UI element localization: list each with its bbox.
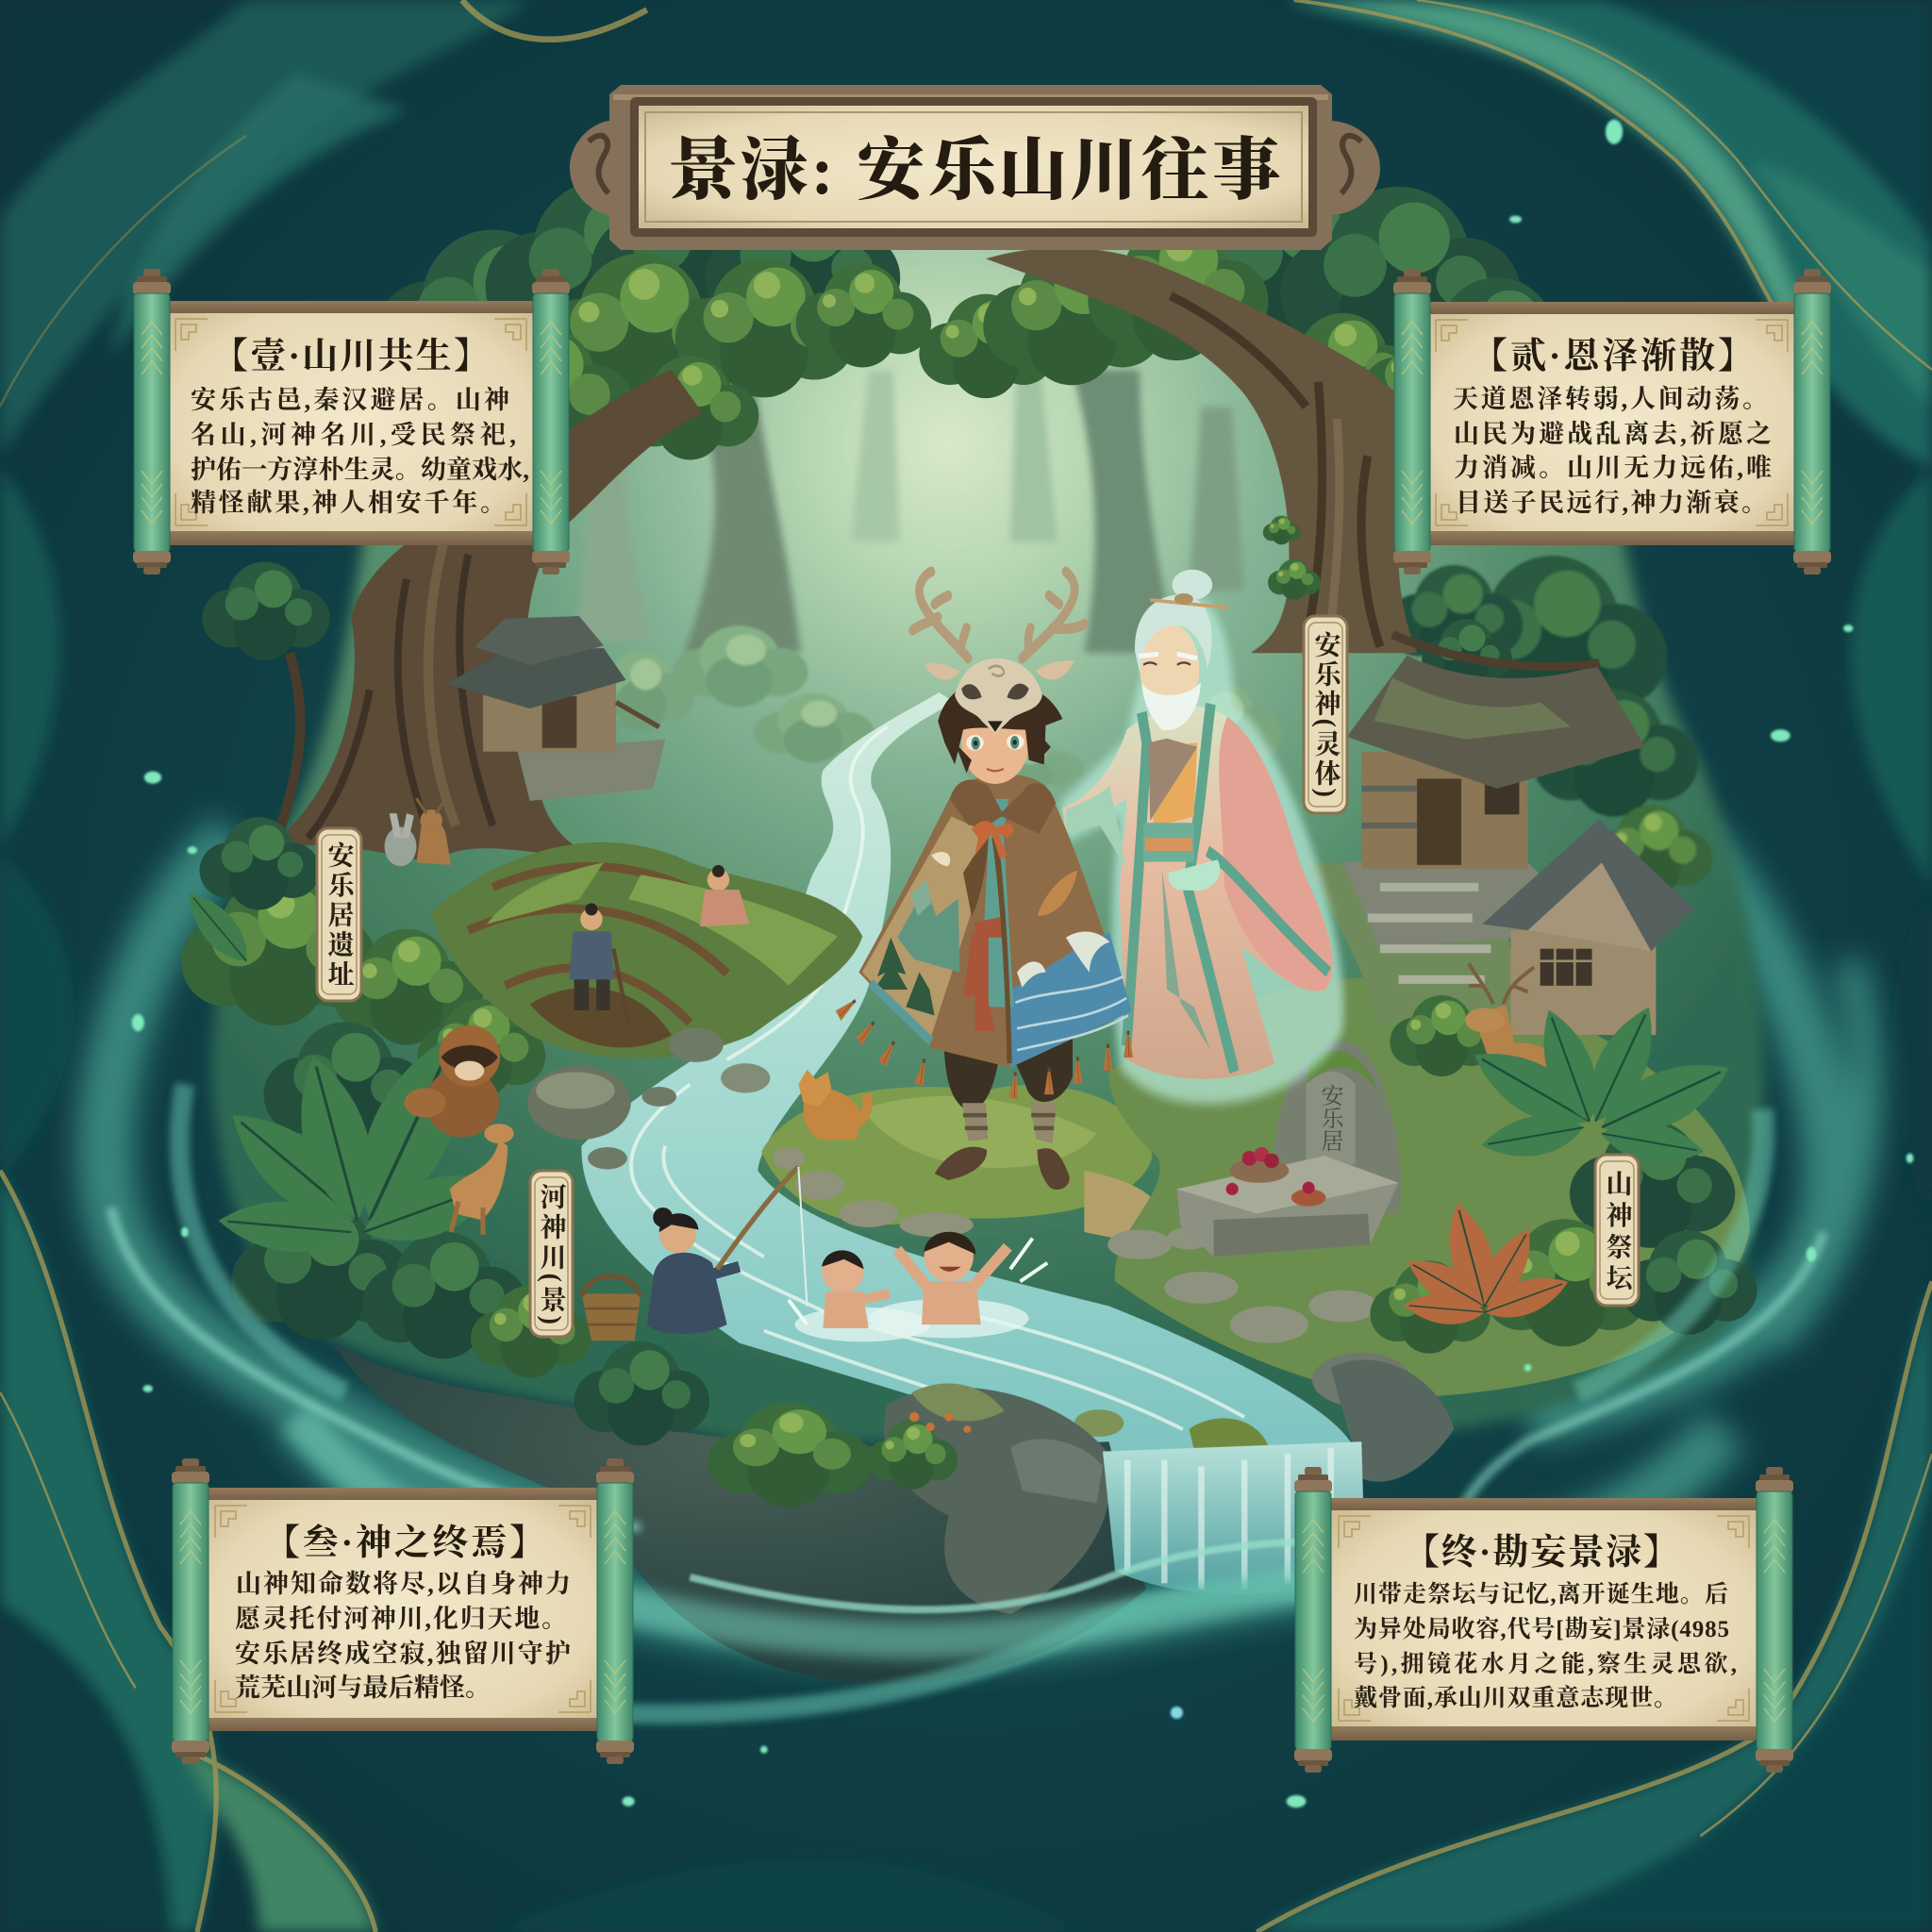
icon: moss-roof house bbox=[1343, 619, 1645, 979]
body text: 山民为避战乱离去,祈愿之 bbox=[1454, 419, 1772, 448]
legs bbox=[935, 1007, 1073, 1190]
panel: 终·勘妄景渌 bbox=[1294, 1467, 1793, 1773]
icon: left jungle leaves bbox=[176, 882, 512, 1258]
title plaque bbox=[570, 85, 1380, 250]
panel: 壹·山川共生 bbox=[133, 269, 570, 575]
body text: 荒芜山河与最后精怪。 bbox=[235, 1674, 491, 1702]
icon: swimming children bbox=[789, 1232, 1047, 1341]
label: 安乐居遗址: 安乐居遗址 bbox=[325, 841, 355, 987]
center grass island bbox=[761, 1085, 1160, 1244]
forest and river island illustration bbox=[111, 168, 1824, 1714]
body text: 戴骨面,承山川双重意志现世。 bbox=[1354, 1684, 1677, 1711]
title text: 景渌: 安乐山川往事 bbox=[669, 133, 1280, 208]
spirit elder (安乐神) bbox=[1059, 570, 1343, 1104]
body text bbox=[191, 386, 529, 517]
label: 安乐神(灵体) bbox=[1304, 616, 1347, 813]
body text: 号),拥镜花水月之能,察生灵思欲, bbox=[1354, 1650, 1737, 1677]
tree canopy bbox=[375, 168, 1596, 497]
body text: 力消减。山川无力远佑,唯 bbox=[1454, 454, 1772, 482]
hood bbox=[950, 780, 1056, 834]
icon: stele and altar bbox=[1176, 1041, 1401, 1257]
heading: 【终·勘妄景渌】 bbox=[1404, 1533, 1679, 1573]
icon: small fawn bbox=[450, 1124, 514, 1235]
boy with deer-skull mask and painted cloak bbox=[858, 572, 1132, 1190]
body text: 护佑一方淳朴生灵。幼童戏水, bbox=[191, 456, 529, 484]
label: 山神祭坛 bbox=[1595, 1155, 1639, 1306]
icon: orange foliage bbox=[1400, 1198, 1574, 1328]
label: 河神川(景): 河神川(景) bbox=[536, 1183, 566, 1324]
icon: tanuki bbox=[404, 1025, 500, 1138]
stele inscription: 安乐居 bbox=[1317, 1084, 1343, 1152]
back glow wisps bbox=[106, 838, 1867, 1641]
label: 安乐居遗址 bbox=[317, 828, 361, 1001]
front glow wisps bbox=[111, 1084, 1824, 1714]
head bbox=[961, 702, 1029, 784]
body text: 安乐居终成空寂,独留川守护 bbox=[235, 1639, 571, 1668]
label: 河神川(景) bbox=[530, 1171, 573, 1337]
stream rocks bbox=[527, 1027, 1124, 1437]
icon: farmers bbox=[569, 865, 749, 1025]
body text: 为异处局收容,代号[勘妄]景渌(4985 bbox=[1354, 1615, 1729, 1642]
heading: 【叁·神之终焉】 bbox=[264, 1524, 545, 1563]
body text bbox=[1453, 385, 1772, 517]
label: 安乐神(灵体): 安乐神(灵体) bbox=[1311, 631, 1341, 797]
icon: fishing child bbox=[647, 1167, 808, 1334]
cloak tassels bbox=[836, 995, 1133, 1099]
left hillside foliage bbox=[181, 817, 591, 1378]
icon: right deer bbox=[1465, 963, 1571, 1091]
body text: 川带走祭坛与记忆,离开诞生地。后 bbox=[1354, 1580, 1728, 1607]
body text: 天道恩泽转弱,人间动荡。 bbox=[1453, 385, 1768, 413]
heading: 【壹·山川共生】 bbox=[212, 337, 490, 376]
terraced fields bbox=[431, 842, 862, 1058]
antlers bbox=[912, 572, 1085, 658]
river bbox=[581, 692, 1357, 1460]
waterfall bbox=[1103, 1441, 1365, 1594]
right bank ground bbox=[1108, 862, 1757, 1407]
icon: rabbit and fawn on hill bbox=[385, 798, 451, 866]
panel: 叁·神之终焉 bbox=[172, 1458, 634, 1764]
icon: left village house bbox=[446, 616, 665, 801]
body text bbox=[1354, 1580, 1737, 1711]
heading: 【贰·恩泽渐散】 bbox=[1472, 337, 1754, 376]
shirt and sash bbox=[980, 799, 1014, 1007]
body text: 愿灵托付河神川,化归天地。 bbox=[235, 1605, 567, 1633]
body text: 精怪献果,神人相安千年。 bbox=[191, 489, 506, 517]
cloak bbox=[858, 774, 1132, 1068]
icon: fox bbox=[798, 1070, 868, 1140]
body text: 山神知命数将尽,以自身神力 bbox=[236, 1570, 571, 1598]
label: 山神祭坛: 山神祭坛 bbox=[1602, 1170, 1632, 1292]
body text bbox=[235, 1570, 571, 1702]
body text: 安乐古邑,秦汉避居。山神 bbox=[191, 386, 509, 414]
mask bbox=[955, 658, 1042, 734]
body text: 目送子民远行,神力渐衰。 bbox=[1456, 489, 1767, 517]
large tree trunks bbox=[202, 247, 1553, 862]
bottom rocky cliff bbox=[333, 1341, 1454, 1685]
panel: 贰·恩泽渐散 bbox=[1393, 269, 1831, 575]
misty background trees bbox=[573, 358, 1244, 653]
icon: basket bbox=[581, 1275, 641, 1341]
body text: 名山,河神名川,受民祭祀, bbox=[191, 421, 516, 449]
icon: lower hut bbox=[1482, 820, 1694, 1035]
icon: large jungle leaves right bbox=[1462, 997, 1740, 1171]
